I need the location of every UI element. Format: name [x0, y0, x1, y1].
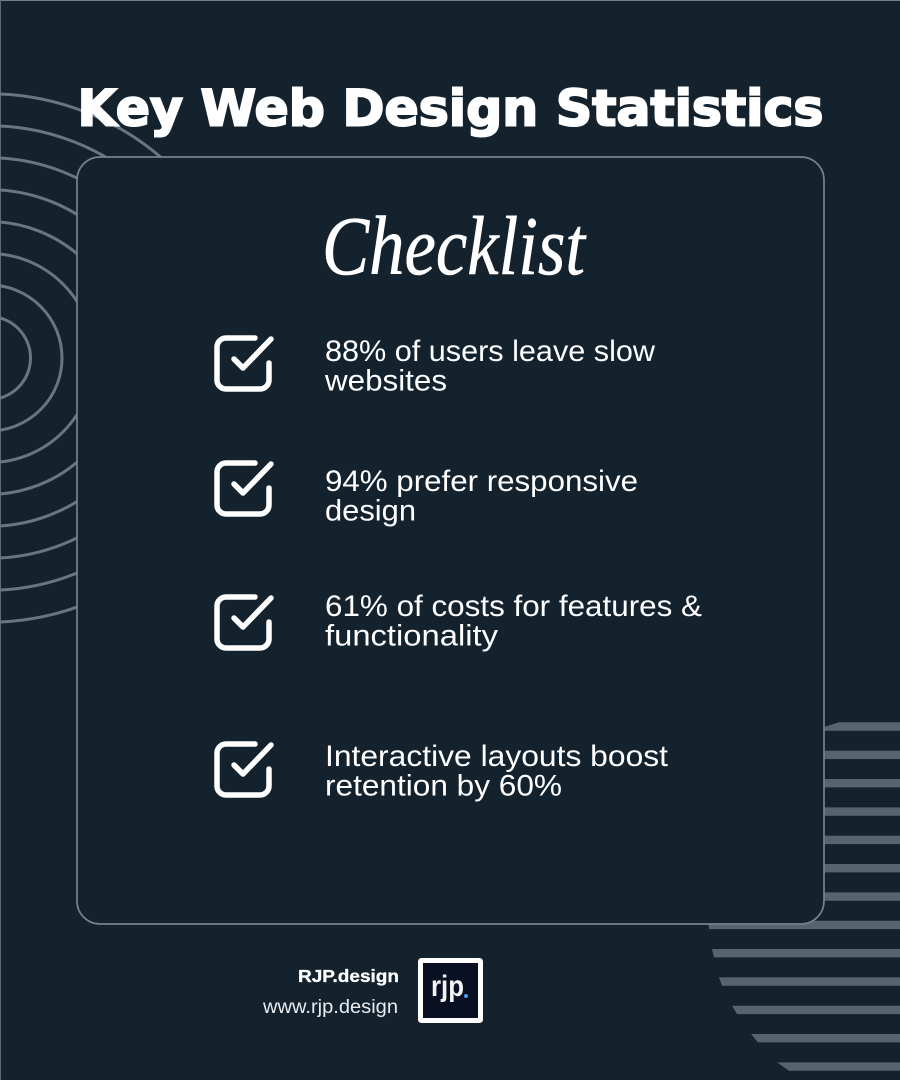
- footer: [262, 958, 483, 1023]
- text: item 1: 88% of users leave slow: [325, 335, 655, 368]
- title: Key Web Design Statistics: [78, 80, 824, 138]
- logo: [418, 958, 483, 1023]
- text: item 4: [325, 740, 669, 803]
- checklist item 2: [217, 463, 638, 528]
- brand name: RJP.design: [298, 966, 399, 986]
- icon: checkbox 4: [217, 744, 271, 795]
- text: item 3: functionality: [325, 620, 498, 653]
- checklist item 4: [217, 740, 669, 803]
- text: item 2: [325, 465, 638, 528]
- text: item 3: 61% of costs for features &: [325, 590, 702, 623]
- checklist item 1: [217, 335, 655, 398]
- checklist item 3: [217, 590, 702, 653]
- heading: Checklist: Checklist: [322, 200, 587, 293]
- text: item 1: [324, 335, 655, 398]
- text: item 2: design: [325, 495, 416, 528]
- text: item 4: Interactive layouts boost: [325, 740, 669, 773]
- text: item 3: [325, 590, 702, 653]
- website url: www.rjp.design: [262, 997, 398, 1018]
- text: item 4: retention by 60%: [325, 770, 562, 803]
- logo: rjp: [431, 970, 464, 1003]
- text: item 2: 94% prefer responsive: [325, 465, 638, 498]
- icon: checkbox 2: [217, 463, 271, 514]
- text: item 1: websites: [324, 365, 447, 398]
- panel: checklist card: [77, 157, 824, 924]
- icon: checkbox 1: [217, 338, 271, 389]
- icon: checkbox 3: [217, 597, 271, 648]
